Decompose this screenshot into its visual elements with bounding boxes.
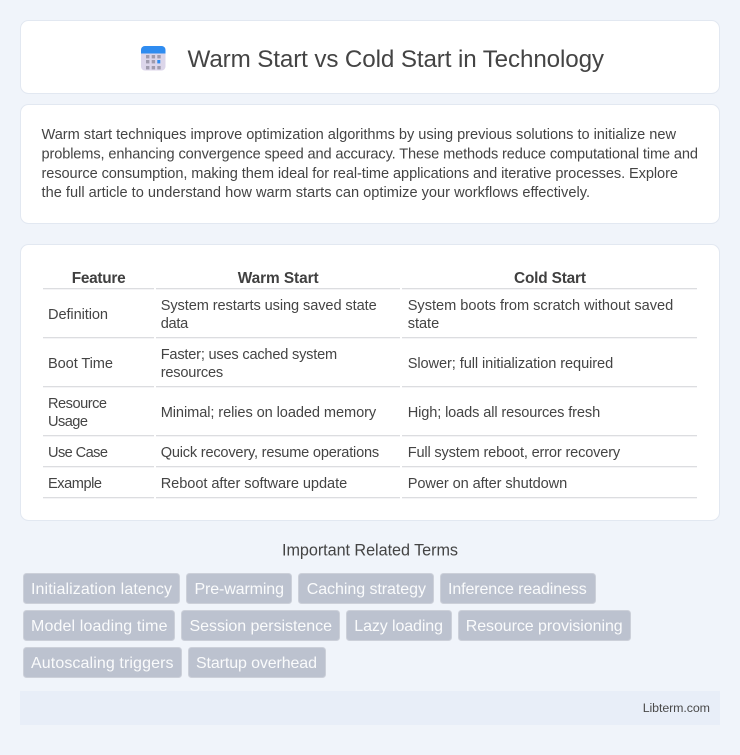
table row: use case: Use Case <box>48 445 108 461</box>
table row: boot time: Slower; full initialization required <box>408 356 613 372</box>
tag: resource provisioning <box>458 610 630 640</box>
table row: resource usage: Usage <box>48 414 88 430</box>
table row: boot time <box>48 347 613 381</box>
icon: calendar <box>141 46 166 70</box>
panel: header <box>20 20 720 94</box>
tag: lazy loading <box>346 610 452 640</box>
text block: introduction: the full article to understand how warm starts can optimize your workflows effectively. <box>42 185 590 201</box>
table row: definition: data <box>161 316 189 332</box>
table header row: Warm Start <box>238 270 319 287</box>
text block: introduction: problems, enhancing convergence speed and accuracy. These methods reduce computational time and <box>42 146 698 162</box>
table row: example <box>48 476 567 492</box>
tag: inference readiness: Inference readiness <box>448 581 587 598</box>
title: Warm Start vs Cold Start in Technology <box>188 46 605 73</box>
table row: use case <box>48 445 621 461</box>
tag: model loading time <box>24 610 174 640</box>
table row: use case: Full system reboot, error recovery <box>408 445 621 461</box>
panel: introduction <box>20 104 720 224</box>
table row: definition: System restarts using saved state <box>161 298 377 314</box>
tag: resource provisioning: Resource provisioning <box>466 618 623 635</box>
table row: resource usage: Minimal; relies on loaded memory <box>161 405 377 421</box>
table row: boot time: Faster; uses cached system <box>161 347 337 363</box>
table row: resource usage <box>48 396 600 430</box>
text block: introduction: resource consumption, making them ideal for real-time applications and iterative processes. Explore <box>42 166 678 182</box>
tag: startup overhead <box>188 648 326 678</box>
table row: use case: Quick recovery, resume operations <box>161 445 379 461</box>
table row: example: Power on after shutdown <box>408 476 567 492</box>
tag: caching strategy: Caching strategy <box>307 581 426 598</box>
table row: definition: System boots from scratch without saved <box>408 298 673 314</box>
tag: startup overhead: Startup overhead <box>196 655 317 672</box>
table header row <box>72 270 586 287</box>
tag: initialization latency: Initialization latency <box>31 581 172 598</box>
table header row: Cold Start <box>514 270 586 287</box>
table row: boot time: resources <box>161 365 223 381</box>
related term tags <box>24 574 630 678</box>
tag: autoscaling triggers: Autoscaling triggers <box>31 655 174 672</box>
table row: definition: state <box>408 316 439 332</box>
tag: session persistence: Session persistence <box>190 618 332 635</box>
text block: introduction <box>42 127 698 201</box>
footer <box>20 691 720 725</box>
table row: example: Reboot after software update <box>161 476 347 492</box>
tag: pre-warming: Pre-warming <box>194 581 284 598</box>
table row: definition: Definition <box>48 307 108 323</box>
tag: inference readiness <box>440 574 596 604</box>
tag: pre-warming <box>186 574 292 604</box>
panel: comparison table <box>20 244 720 520</box>
heading: important related terms: Important Related Terms <box>282 542 458 560</box>
table row: example: Example <box>48 476 102 492</box>
tag: lazy loading: Lazy loading <box>354 618 443 635</box>
footer credit: Libterm.com <box>643 701 710 715</box>
tag: session persistence <box>182 610 340 640</box>
table row: boot time: Boot Time <box>48 356 113 372</box>
tag: autoscaling triggers <box>24 648 182 678</box>
table row: resource usage: Resource <box>48 396 107 412</box>
tag: model loading time: Model loading time <box>31 618 168 635</box>
table row: definition <box>48 298 673 332</box>
text block: introduction: Warm start techniques improve optimization algorithms by using previous solutions to initialize new <box>42 127 676 143</box>
table row: resource usage: High; loads all resources fresh <box>408 405 600 421</box>
tag: caching strategy <box>298 574 434 604</box>
tag: initialization latency <box>24 574 180 604</box>
table header row: Feature <box>72 270 126 287</box>
